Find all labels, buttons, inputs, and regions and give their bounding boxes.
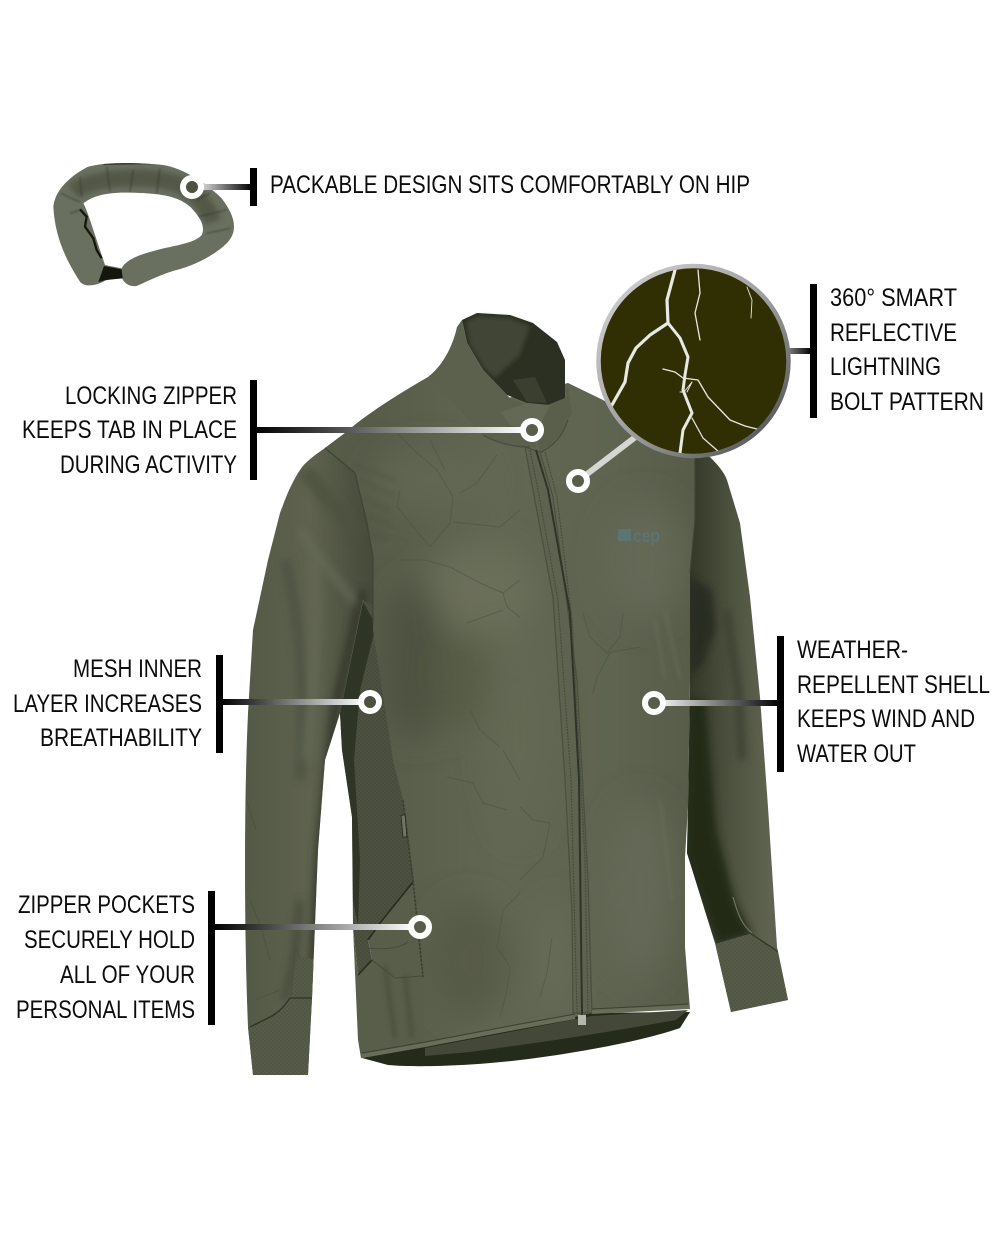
collar inner left facing xyxy=(466,316,530,378)
bar leader xyxy=(786,348,812,354)
mesh dark shadow xyxy=(340,602,376,925)
cuff seam xyxy=(250,998,312,1027)
inner lining mesh xyxy=(425,1010,688,1056)
yoke pleats xyxy=(355,465,395,540)
marker xyxy=(183,178,201,196)
pouch body xyxy=(53,163,234,286)
collar outer right xyxy=(536,383,572,453)
marker xyxy=(523,421,541,439)
hem band xyxy=(362,1007,689,1056)
bar xyxy=(208,891,215,1025)
callout: packable design xyxy=(183,168,750,206)
label: PERSONAL ITEMS xyxy=(16,996,195,1024)
reflective lightning pattern xyxy=(397,433,640,1017)
sleeve folds xyxy=(285,470,363,1000)
zipper stitching xyxy=(530,450,588,1012)
left cuff xyxy=(246,955,315,1080)
right cuff xyxy=(715,934,788,1012)
label: LOCKING ZIPPER xyxy=(65,382,237,410)
bar xyxy=(810,284,817,418)
hip fold shading xyxy=(385,965,412,1038)
zipper pull xyxy=(578,1015,586,1025)
callout: locking zipper xyxy=(22,380,541,480)
torso xyxy=(320,370,700,1060)
label: BREATHABILITY xyxy=(40,724,202,752)
label: DURING ACTIVITY xyxy=(60,451,237,479)
bar xyxy=(250,380,257,480)
lens xyxy=(598,266,788,456)
leader line xyxy=(654,700,780,706)
label: SECURELY HOLD xyxy=(24,926,195,954)
inner lining dark hem xyxy=(360,1012,690,1066)
bar xyxy=(216,655,223,753)
label: WEATHER- xyxy=(797,636,908,664)
left sleeve xyxy=(245,433,372,1075)
label: LAYER INCREASES xyxy=(13,690,202,718)
collar outer left xyxy=(428,320,536,448)
strap xyxy=(80,209,102,258)
callout: mesh inner layer xyxy=(13,655,379,753)
hip panel xyxy=(353,882,434,1058)
leader line xyxy=(192,184,252,190)
bar xyxy=(777,636,784,772)
right edge creases xyxy=(655,610,680,900)
label: PACKABLE DESIGN SITS COMFORTABLY ON HIP xyxy=(270,171,750,199)
cep logo xyxy=(618,526,660,546)
mesh dark edge xyxy=(358,882,413,975)
label: ALL OF YOUR xyxy=(60,961,195,989)
pouch puffy shading xyxy=(62,163,230,233)
zipper line xyxy=(536,450,582,1015)
callout: weather-repellent shell xyxy=(645,636,990,772)
marker xyxy=(411,918,429,936)
logo mark xyxy=(618,529,631,541)
marker xyxy=(645,694,663,712)
label: REFLECTIVE xyxy=(830,319,957,347)
bar xyxy=(250,168,257,206)
collar base line xyxy=(483,420,568,453)
label xyxy=(797,636,990,768)
mesh side panel xyxy=(340,600,420,975)
collar inner label xyxy=(513,377,547,403)
lightning bolt xyxy=(612,270,757,453)
marker xyxy=(361,693,379,711)
right sleeve xyxy=(687,456,788,1012)
leader line xyxy=(255,427,525,433)
collar inner xyxy=(462,313,565,405)
label xyxy=(13,655,202,752)
label: ZIPPER POCKETS xyxy=(18,891,195,919)
sleeve dark folds xyxy=(685,575,752,945)
diagonal leader xyxy=(578,432,642,481)
clasp xyxy=(98,266,123,282)
pocket pull xyxy=(401,815,407,837)
hem seam line xyxy=(362,1004,688,1053)
torso shading xyxy=(388,524,672,1006)
label: LIGHTNING xyxy=(830,353,941,381)
zipper placket xyxy=(525,447,592,1013)
hip seam xyxy=(368,942,423,978)
label xyxy=(16,891,195,1024)
cuff seam xyxy=(716,933,780,953)
leader line xyxy=(220,699,365,705)
label xyxy=(830,284,984,416)
logo word: cep xyxy=(633,526,660,546)
label: WATER OUT xyxy=(797,740,916,768)
sleeve pattern lines xyxy=(243,790,300,1000)
jacket xyxy=(240,313,795,1080)
armhole seam xyxy=(325,448,695,625)
marker xyxy=(569,472,587,490)
label: KEEPS TAB IN PLACE xyxy=(22,416,237,444)
label: 360° SMART xyxy=(830,284,957,312)
packable pouch xyxy=(53,163,234,286)
leader line xyxy=(212,924,415,930)
collar gathered front xyxy=(500,398,570,432)
pocket zipper xyxy=(403,800,423,977)
callout: zipper pockets xyxy=(16,891,429,1025)
label: MESH INNER xyxy=(73,655,202,683)
callout: lightning pattern xyxy=(569,266,984,490)
label xyxy=(22,382,237,479)
